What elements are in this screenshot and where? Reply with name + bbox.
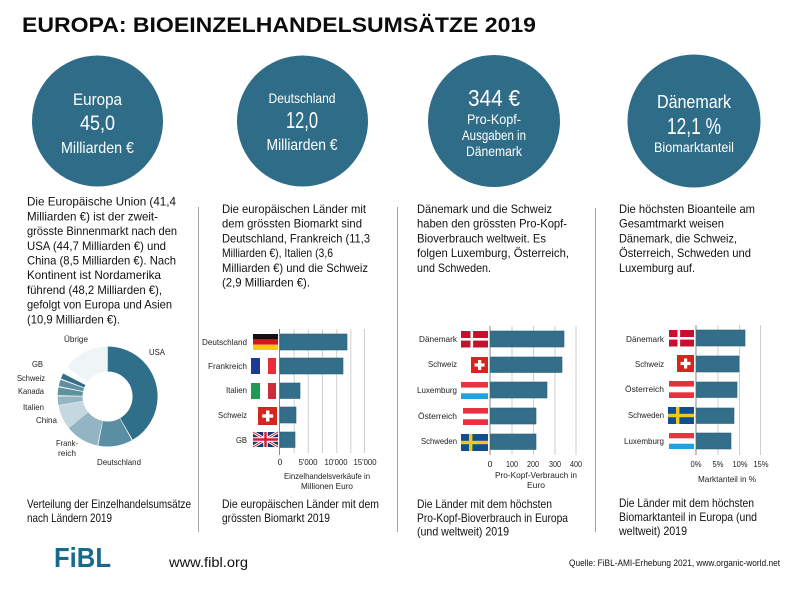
stat circle: Deutschland 12,0 Milliarden €: 12,0: [286, 107, 318, 133]
caption: Biomarktanteil: weltweit) 2019: [618, 524, 687, 538]
donut chart: Verteilung nach Ländern: Deutschland: [97, 457, 141, 467]
flag: Schweiz: [258, 407, 277, 425]
stat circle: Deutschland 12,0 Milliarden €: Deutschland: [268, 90, 336, 106]
caption: Biomarktanteil: Biomarktanteil in Europa (und: [619, 510, 757, 524]
stat circle: 344 € Pro-Kopf-Ausgaben: Pro-Kopf-: [467, 112, 521, 127]
bar chart: Einzelhandelsverkäufe: Frankreich: [208, 361, 247, 371]
website link: www.fibl.org: [168, 555, 248, 570]
text block: Biomarktanteil: Gesamtmarkt weisen: [619, 217, 724, 231]
flag: Frankreich: [251, 358, 276, 374]
bar chart: Pro-Kopf-Verbrauch: Euro: [527, 480, 545, 490]
bar chart: Marktanteil: 15%: [754, 459, 769, 469]
flag: Schweiz: [471, 357, 488, 373]
text block: Pro-Kopf: folgen Luxemburg, Österreich,: [417, 246, 569, 260]
stat circle: Europa 45,0 Milliarden €: Milliarden €: [61, 140, 134, 157]
text block: Biomarktanteil: [619, 202, 755, 275]
flag: GB: [253, 432, 278, 447]
bar chart: Marktanteil: 5%: [712, 459, 724, 469]
text block: Pro-Kopf: [417, 202, 569, 275]
flag: Deutschland: [253, 334, 278, 350]
text block: Pro-Kopf: Bioverbrauch weltweit. Es: [417, 231, 546, 245]
flag: Österreich: [669, 381, 694, 398]
text block: Deutschland: [222, 202, 370, 290]
stat circle: Dänemark 12,1 % Biomarktanteil: [628, 54, 760, 188]
text block: Europa: China (8,5 Milliarden €). Nach: [27, 254, 176, 268]
text block: Deutschland: Milliarden €), Italien (3,6: [222, 246, 333, 260]
flag: Italien: [251, 383, 276, 399]
donut chart: Verteilung nach Ländern: Frank-: [56, 438, 78, 448]
caption: Biomarktanteil: Die Länder mit dem höchsten: [619, 496, 754, 510]
bar chart: Einzelhandelsverkäufe: 15'000: [354, 457, 377, 467]
bar chart: Marktanteil: Schweiz: [635, 359, 664, 369]
text block: Pro-Kopf: haben den grössten Pro-Kopf-: [417, 217, 567, 231]
text block: Europa: führend (48,2 Milliarden €),: [27, 283, 162, 297]
bar chart: Pro-Kopf-Verbrauch: Schweden: [421, 436, 457, 446]
text block: Europa: (10,9 Milliarden €).: [27, 312, 120, 326]
bar chart: Einzelhandelsverkäufe: Schweiz: [218, 410, 247, 420]
bar chart: Marktanteil: 10%: [732, 459, 748, 469]
bar chart: Pro-Kopf-Verbrauch: 200: [527, 459, 539, 469]
bar chart: Einzelhandelsverkäufe: GB: [236, 435, 247, 445]
text block: Pro-Kopf: und Schweden.: [417, 261, 491, 275]
flag: Dänemark: [461, 331, 488, 348]
bar chart: Einzelhandelsverkäufe: 10'000: [324, 457, 348, 467]
panel: Europa: [17, 56, 191, 525]
caption: Europa: Verteilung der Einzelhandelsumsätze: [27, 497, 191, 511]
flag: Schweden: [461, 434, 488, 451]
caption: Biomarktanteil: [618, 496, 757, 538]
stat circle: 344 € Pro-Kopf-Ausgaben: [428, 55, 560, 187]
donut chart: Verteilung nach Ländern: USA: [149, 347, 165, 357]
stat circle: Dänemark 12,1 % Biomarktanteil: Biomarktanteil: [654, 140, 734, 155]
donut chart: Verteilung nach Ländern: Kanada: [18, 386, 44, 396]
flag: Österreich: [463, 408, 488, 425]
stat circle: Europa 45,0 Milliarden €: Europa: [73, 90, 122, 109]
text block: Biomarktanteil: Die höchsten Bioanteile am: [619, 202, 755, 216]
logo: FiBL: FiBL: [54, 542, 111, 573]
caption: Pro-Kopf: [417, 497, 568, 538]
text block: Europa: USA (44,7 Milliarden €) und: [27, 239, 166, 253]
bar chart: Einzelhandelsverkäufe: [202, 329, 377, 491]
bar chart: Marktanteil: Luxemburg: [624, 436, 664, 446]
flag: Luxemburg: [669, 433, 694, 449]
donut chart: Verteilung nach Ländern: Schweiz: [17, 373, 45, 383]
title: EUROPA: BIOEINZELHANDELSUMSÄTZE 2019: [22, 14, 536, 37]
bar chart: Marktanteil: 0%: [690, 459, 702, 469]
panel: Biomarktanteil: [618, 54, 769, 538]
donut chart: Verteilung nach Ländern: [17, 334, 165, 467]
flag: Dänemark: [669, 330, 694, 346]
text block: Europa: grösste Binnenmarkt nach den: [27, 224, 177, 238]
bar chart: Pro-Kopf-Verbrauch: 300: [549, 459, 561, 469]
text block: Biomarktanteil: Österreich, Schweden und: [619, 246, 751, 260]
caption: Pro-Kopf: (und weltweit) 2019: [417, 524, 509, 538]
bar chart: Marktanteil: Dänemark: [626, 334, 665, 344]
text block: Europa: Die Europäische Union (41,4: [27, 195, 176, 209]
bar chart: Einzelhandelsverkäufe: Einzelhandelsverkäufe in: [284, 471, 370, 481]
stat circle: Europa 45,0 Milliarden €: [32, 56, 163, 186]
bar chart: Einzelhandelsverkäufe: Millionen Euro: [301, 481, 353, 491]
caption: Pro-Kopf: Die Länder mit dem höchsten: [417, 497, 552, 511]
donut chart: Verteilung nach Ländern: GB: [32, 359, 43, 369]
caption: Europa: [27, 497, 191, 525]
stat circle: 344 € Pro-Kopf-Ausgaben: Ausgaben in: [462, 128, 526, 143]
flag: Luxemburg: [461, 382, 488, 399]
bar chart: Einzelhandelsverkäufe: 5'000: [298, 457, 318, 467]
bar chart: Pro-Kopf-Verbrauch: 100: [506, 459, 518, 469]
caption: Europa: nach Ländern 2019: [27, 511, 112, 525]
flag: Schweden: [668, 407, 694, 424]
panel: Pro-Kopf-Ausgaben: [417, 55, 582, 538]
text block: Deutschland: (2,9 Milliarden €).: [222, 276, 310, 290]
text block: Europa: Kontinent ist Nordamerika: [27, 268, 161, 282]
bar chart: Pro-Kopf-Verbrauch: Dänemark: [419, 334, 458, 344]
text block: Pro-Kopf: Dänemark und die Schweiz: [417, 202, 552, 216]
text block: Deutschland: dem grössten Biomarkt sind: [222, 217, 362, 231]
panel: Deutschland: [202, 56, 379, 525]
stat circle: Europa 45,0 Milliarden €: 45,0: [80, 112, 115, 135]
bar chart: Marktanteil: Österreich: [625, 384, 664, 394]
stat circle: 344 € Pro-Kopf-Ausgaben: 344 €: [468, 85, 520, 111]
bar chart: Einzelhandelsverkäufe: 0: [278, 457, 283, 467]
caption: Deutschland: [222, 497, 379, 525]
bar chart: Pro-Kopf-Verbrauch: [417, 326, 582, 490]
donut chart: Verteilung nach Ländern: Italien: [23, 402, 44, 412]
donut chart: Verteilung nach Ländern: Übrige: [64, 334, 88, 344]
text block: Biomarktanteil: Dänemark, die Schweiz,: [619, 231, 737, 245]
text block: Europa: [27, 195, 177, 326]
text block: Biomarktanteil: Luxemburg auf.: [619, 261, 695, 275]
text block: Deutschland: Milliarden €) und die Schweiz: [222, 261, 368, 275]
text block: Europa: Milliarden €) ist der zweit-: [27, 209, 158, 223]
text block: Deutschland: Die europäischen Länder mit: [222, 202, 367, 216]
stat circle: Dänemark 12,1 % Biomarktanteil: Dänemark: [657, 92, 732, 112]
bar chart: Marktanteil: Marktanteil in %: [698, 474, 756, 484]
stat circle: Deutschland 12,0 Milliarden €: [237, 56, 368, 186]
bar chart: Marktanteil: [624, 325, 769, 484]
bar chart: Marktanteil: Schweden: [628, 410, 664, 420]
bar chart: Pro-Kopf-Verbrauch: Pro-Kopf-Verbrauch in: [495, 470, 577, 480]
donut chart: Verteilung nach Ländern: China: [36, 415, 57, 425]
flag: Schweiz: [677, 355, 694, 372]
bar chart: Einzelhandelsverkäufe: Italien: [226, 385, 247, 395]
stat circle: 344 € Pro-Kopf-Ausgaben: Dänemark: [466, 144, 522, 159]
caption: Pro-Kopf: Pro-Kopf-Bioverbrauch in Europa: [417, 511, 568, 525]
bar chart: Pro-Kopf-Verbrauch: 400: [570, 459, 582, 469]
donut chart: Verteilung nach Ländern: reich: [58, 448, 76, 458]
text block: Europa: gefolgt von Europa und Asien: [27, 298, 172, 312]
stat circle: Deutschland 12,0 Milliarden €: Milliarden €: [266, 137, 338, 154]
caption: Deutschland: Die europäischen Länder mit dem: [222, 497, 379, 511]
bar chart: Pro-Kopf-Verbrauch: 0: [488, 459, 493, 469]
bar chart: Pro-Kopf-Verbrauch: Österreich: [418, 411, 457, 421]
bar chart: Einzelhandelsverkäufe: Deutschland: [202, 337, 247, 347]
bar chart: Pro-Kopf-Verbrauch: Schweiz: [428, 359, 457, 369]
caption: Deutschland: grössten Biomarkt 2019: [222, 511, 330, 525]
text block: Deutschland: Deutschland, Frankreich (11,3: [222, 231, 370, 245]
bar chart: Pro-Kopf-Verbrauch: Luxemburg: [417, 385, 457, 395]
stat circle: Dänemark 12,1 % Biomarktanteil: 12,1 %: [667, 113, 721, 139]
